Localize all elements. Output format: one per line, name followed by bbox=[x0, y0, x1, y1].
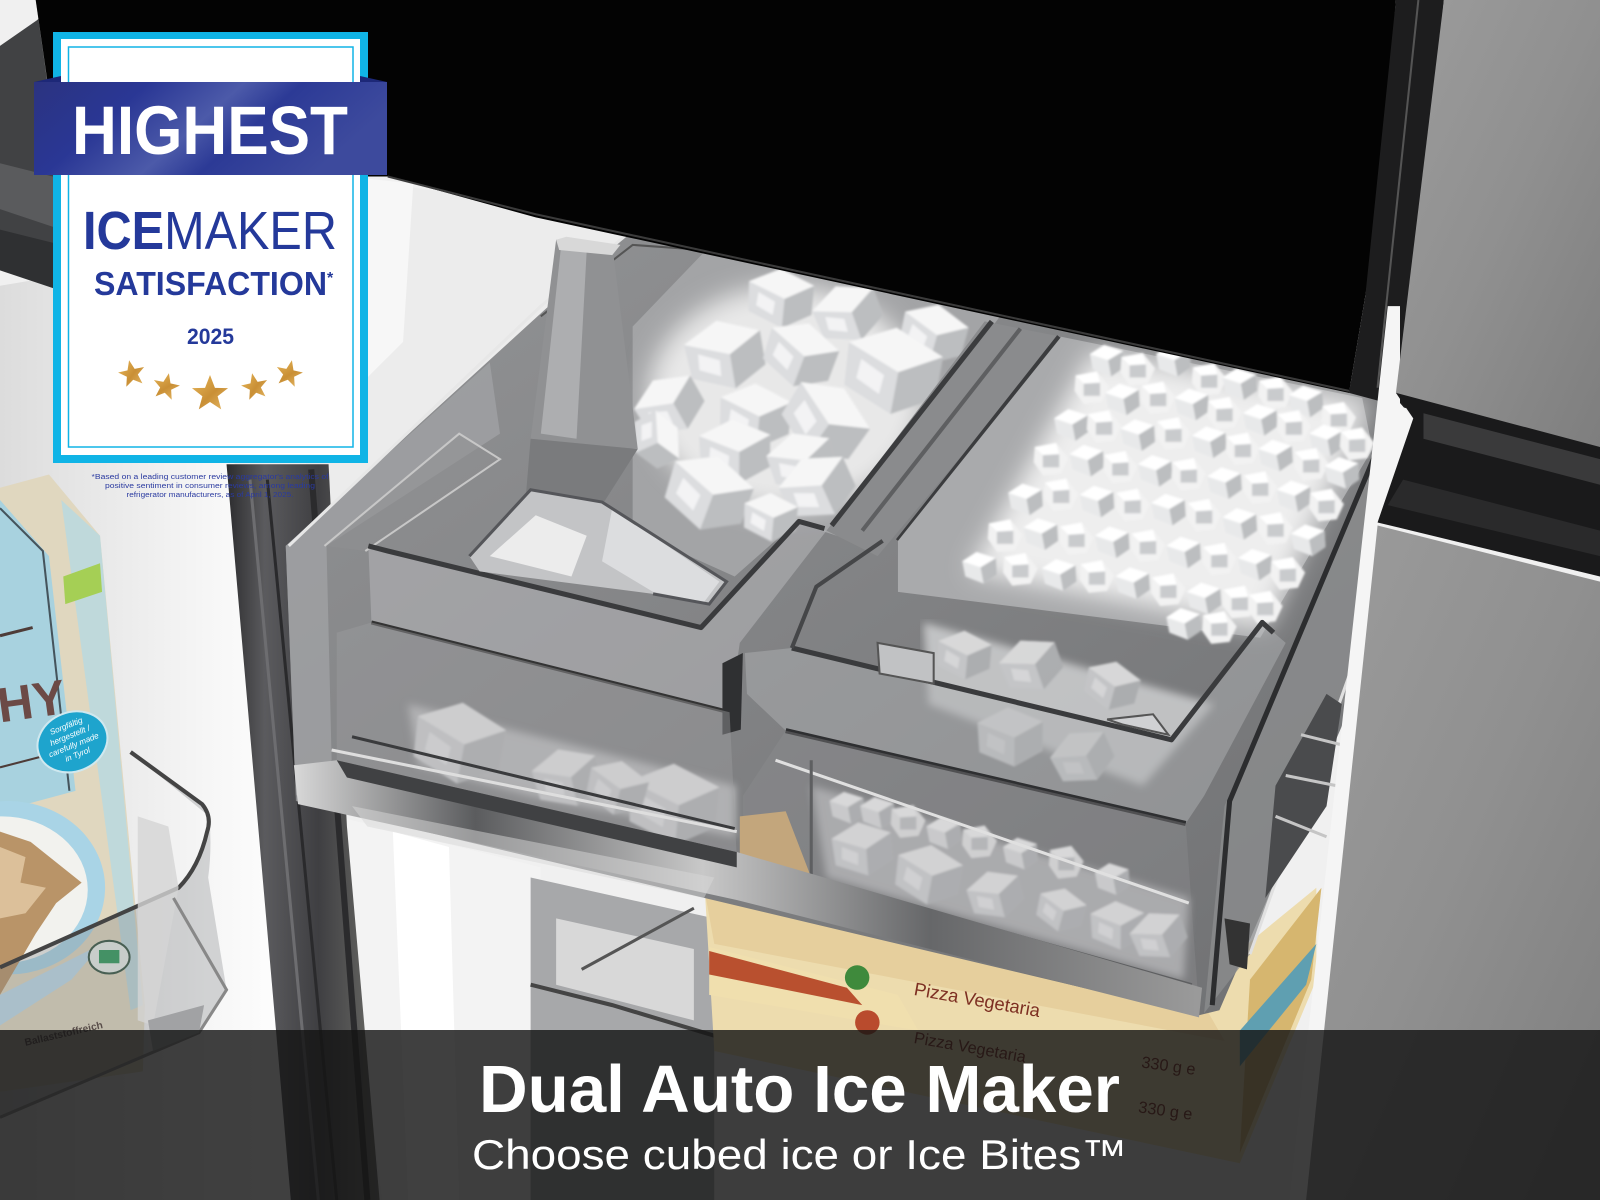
cereal round seal bbox=[28, 701, 117, 783]
cereal round seal: in Tyrol bbox=[64, 746, 92, 764]
cereal round seal: carefully made bbox=[48, 731, 101, 759]
ice seen through left lower tray bbox=[404, 692, 735, 851]
award badge bbox=[34, 32, 387, 499]
lower freezer drawer bbox=[531, 878, 714, 1200]
ice bites bbox=[962, 345, 1374, 644]
freezer interior wall bbox=[306, 173, 653, 1200]
satisfaction asterisk: * bbox=[327, 270, 334, 287]
left compartment rear wall bbox=[633, 250, 1000, 577]
tray bottom gap showing pizza reflection bbox=[740, 811, 811, 878]
footnote: *Based on a leading customer review aggregator's analytics of bbox=[92, 474, 329, 481]
ice scoop bbox=[469, 237, 727, 604]
caption title: Dual Auto Ice Maker bbox=[479, 1052, 1120, 1127]
ice seen through right lower tray bbox=[811, 786, 1191, 980]
footnote: refrigerator manufacturers, as of April 1, 2025. bbox=[126, 492, 294, 499]
banner heading: HIGHEST bbox=[72, 92, 348, 169]
right steel door upper bbox=[1396, 0, 1600, 449]
right lower tray bbox=[743, 731, 1199, 1010]
ice maker heading: ICEMAKER bbox=[83, 201, 337, 261]
banner fold left bbox=[34, 76, 61, 82]
badge thin border bbox=[68, 47, 353, 447]
pizza box label: Pizza Vegetaria bbox=[913, 978, 1043, 1021]
left outer glass frame bbox=[286, 230, 704, 796]
door gasket strip bbox=[227, 464, 380, 1200]
caption band bbox=[0, 1030, 1600, 1200]
left door liner bbox=[0, 276, 296, 1200]
white door edge bbox=[1290, 306, 1413, 1200]
door bin bbox=[0, 752, 227, 1117]
banner bbox=[34, 82, 387, 175]
year: 2025 bbox=[187, 324, 234, 349]
caption subtitle: Choose cubed ice or Ice Bites™ bbox=[472, 1131, 1127, 1178]
cereal round seal: Sorgfältig bbox=[48, 715, 84, 737]
satisfaction heading: SATISFACTION bbox=[94, 265, 327, 302]
black door panel bbox=[36, 0, 1444, 408]
right compartment rear wall bbox=[898, 337, 1372, 638]
right door gap bbox=[1378, 393, 1600, 577]
top left door panel bbox=[0, 0, 61, 291]
cubed ice bbox=[625, 264, 975, 545]
footnote: positive sentiment in consumer reviews, among leading bbox=[105, 483, 315, 490]
pizza box lower labels: 330 g e bbox=[1137, 1098, 1194, 1124]
pizza box lower labels bbox=[913, 1029, 1197, 1124]
banner fold right bbox=[360, 76, 387, 82]
star rating bbox=[116, 358, 305, 409]
pizza box lower labels: 330 g e bbox=[1140, 1053, 1197, 1079]
cereal label: Ballaststoffreich bbox=[24, 1020, 104, 1049]
left upper tray bbox=[368, 521, 827, 735]
ice seen through right upper tray bbox=[923, 622, 1214, 792]
pizza box lower labels: Pizza Vegetaria bbox=[913, 1029, 1028, 1067]
right upper tray bbox=[745, 541, 1286, 823]
footnote bbox=[92, 474, 329, 499]
right side glass and vents bbox=[1204, 449, 1376, 1013]
ice bin body bbox=[286, 230, 1393, 1015]
chrome front rail bbox=[294, 760, 1202, 1017]
cereal bowl bbox=[0, 801, 105, 974]
cereal round seal: hergestellt / bbox=[49, 723, 92, 748]
left lower tray bbox=[332, 622, 737, 857]
badge outer frame bbox=[53, 32, 368, 463]
pizza boxes bbox=[704, 878, 1321, 1163]
badge inner panel bbox=[61, 39, 360, 455]
cereal box bbox=[0, 474, 145, 1092]
centre divider bbox=[827, 321, 1061, 556]
right steel door lower bbox=[1306, 526, 1600, 1200]
